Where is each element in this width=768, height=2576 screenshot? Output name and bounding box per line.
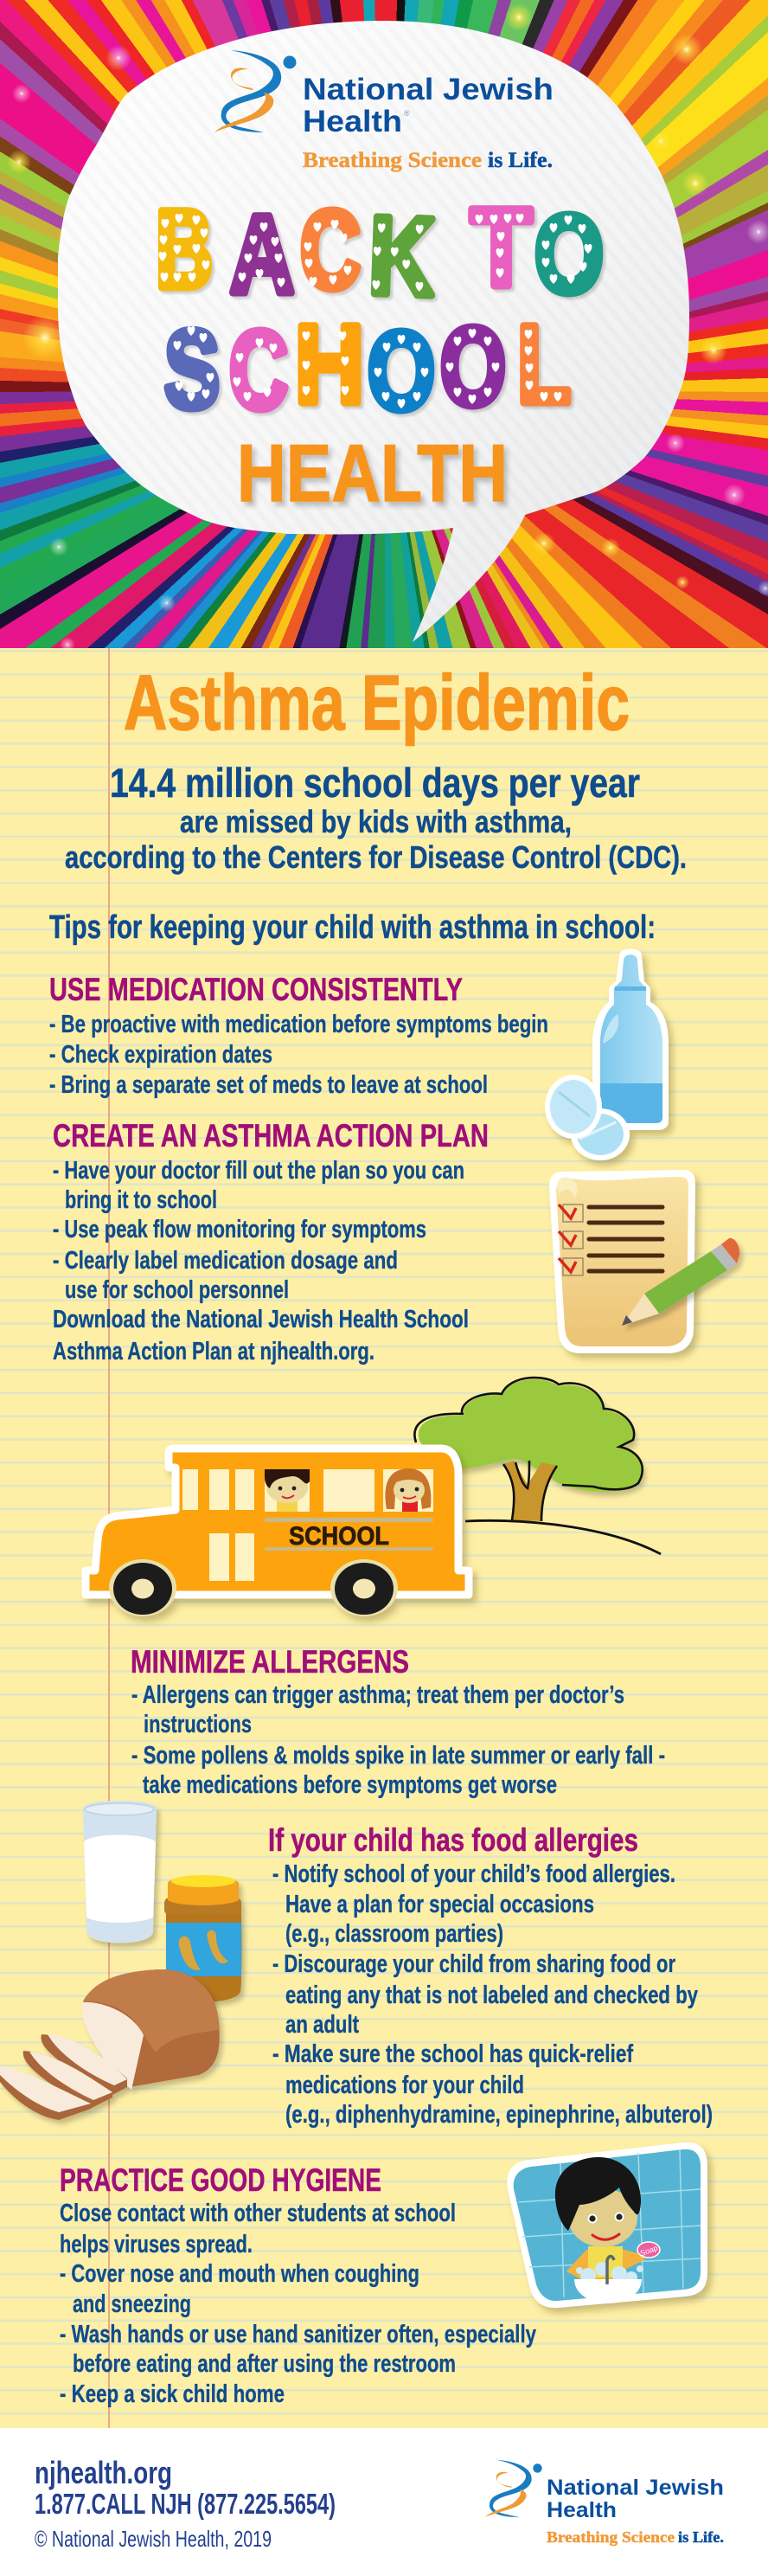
title letter L: L [517,303,571,427]
logo: National Jewish Health: ® [404,109,410,118]
footer contact text [35,2455,336,2552]
title letter C: C [300,189,361,312]
section: create an asthma action plan: Download the National Jewish Health School [53,1306,469,1333]
icon: medicine bottle and pills [545,948,669,1160]
title letter T: T [470,186,532,310]
title letter K: K [368,194,436,319]
sparkles on rays [7,3,768,652]
section: minimize allergens: MINIMIZE ALLERGENS [131,1644,409,1680]
title letter C: C [229,309,288,433]
footer logo: National Jewish [547,2476,724,2500]
section: create an asthma action plan: - Clearly label medication dosage and [53,1247,398,1275]
footer contact text: njhealth.org [35,2455,172,2490]
section: practice good hygiene: before eating and after using the restroom [73,2350,456,2378]
illustration: peanut butter jar [164,1875,242,2002]
front wheel [109,1559,176,1616]
footer contact text: 1.877.CALL NJH (877.225.5654) [35,2488,336,2520]
illustration: child washing hands: Soap [639,2244,659,2258]
logo: National Jewish Health: National Jewish [303,73,554,106]
title letter O: O [368,310,435,434]
key statistic text: 14.4 million school days per year [110,760,640,806]
section: use medication consistently [49,972,548,1099]
title letter H: H [295,303,364,427]
section: practice good hygiene: - Cover nose and mouth when coughing [60,2260,419,2288]
footer panel [0,2428,768,2576]
section: practice good hygiene: helps viruses spread. [60,2231,253,2258]
section: practice good hygiene: Close contact with other students at school [60,2200,456,2227]
title letter O: O [440,305,506,429]
key statistic text: are missed by kids with asthma, [180,804,572,839]
sunburst rays background [0,0,768,649]
key statistic text [65,760,687,875]
section: food allergies: Have a plan for special occasions [285,1891,594,1918]
section: food allergies: medications for your child [285,2072,524,2099]
footer logo: is Life. [678,2528,724,2546]
logo: National Jewish Health: Health [303,105,402,138]
illustration: child washing hands [507,2142,707,2308]
section: use medication consistently: - Check expiration dates [49,1041,272,1069]
section: practice good hygiene: - Keep a sick child home [60,2380,285,2408]
section: use medication consistently: USE MEDICATION CONSISTENTLY [49,972,463,1007]
section: create an asthma action plan [53,1118,489,1365]
section: practice good hygiene: PRACTICE GOOD HYGIENE [60,2162,381,2198]
section: minimize allergens: - Allergens can trigger asthma; treat them per doctor’s [131,1681,624,1709]
heading: Asthma Epidemic: Asthma Epidemic [124,660,630,747]
section: create an asthma action plan: bring it to school [65,1186,217,1214]
section: food allergies [268,1822,713,2129]
section: food allergies: an adult [285,2011,359,2039]
section: use medication consistently: - Bring a separate set of meds to leave at school [49,1071,488,1099]
illustration: school bus [86,1449,469,1616]
title: Back to School [156,186,604,434]
section: minimize allergens: take medications before symptoms get worse [143,1771,557,1799]
section: practice good hygiene: - Wash hands or use hand sanitizer often, especially [60,2321,536,2348]
illustration: bread loaf and slices [0,1969,220,2120]
illustration: glass of milk [83,1801,157,1943]
logo: National Jewish Health [214,50,554,172]
rear wheel [330,1559,398,1616]
logo: National Jewish Health: Breathing Science [303,149,482,172]
girl in bus window [386,1468,431,1512]
section: minimize allergens: instructions [144,1711,252,1738]
boy in bus window [265,1469,310,1512]
icon: checklist and pencil [549,1170,739,1353]
notebook paper background [0,648,768,2428]
section: create an asthma action plan: use for school personnel [65,1276,289,1304]
title letter B: B [156,188,213,312]
section: minimize allergens [131,1644,665,1799]
logo: National Jewish Health: is Life. [488,149,553,172]
section: practice good hygiene: and sneezing [73,2290,191,2318]
speech bubble [58,21,689,642]
section: food allergies: If your child has food allergies [268,1822,638,1858]
footer logo [485,2460,724,2546]
section: create an asthma action plan: - Use peak flow monitoring for symptoms [53,1216,426,1243]
bus label: SCHOOL [289,1522,389,1551]
section: create an asthma action plan: Asthma Action Plan at njhealth.org. [53,1338,374,1365]
section: practice good hygiene [60,2162,536,2408]
footer contact text: © National Jewish Health, 2019 [35,2526,272,2552]
section: create an asthma action plan: CREATE AN ASTHMA ACTION PLAN [53,1118,489,1153]
section: use medication consistently: - Be proactive with medication before symptoms begin [49,1011,548,1038]
red margin line [107,648,109,2428]
title letter A: A [230,193,294,317]
illustration: tree [414,1378,661,1554]
section: create an asthma action plan: - Have your doctor fill out the plan so you can [53,1157,464,1185]
bus windows [182,1469,433,1581]
title letter O: O [534,193,604,317]
title: HEALTH: HEALTH [237,427,508,518]
section: food allergies: (e.g., classroom parties) [285,1920,503,1948]
footer logo: Breathing Science [547,2528,675,2546]
title letter S: S [164,308,220,432]
footer logo: Health [547,2498,617,2522]
section: food allergies: - Make sure the school has quick-relief [272,2040,633,2068]
